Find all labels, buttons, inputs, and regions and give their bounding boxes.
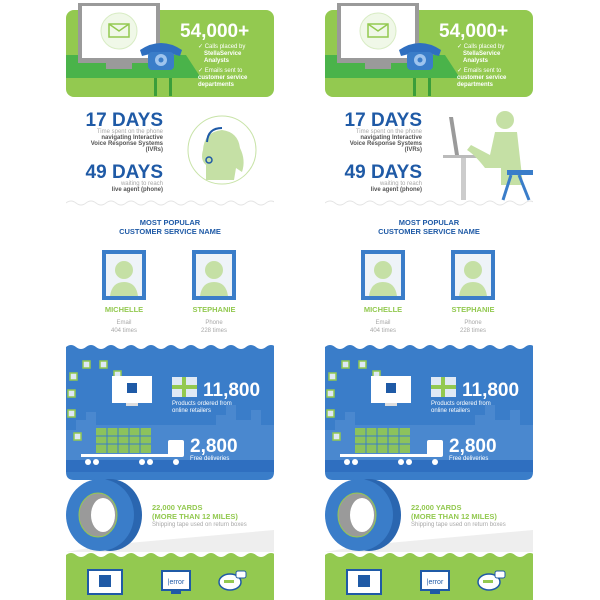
stat: 54,000+: Analysts — [463, 58, 489, 64]
stat: 17 days: Voice Response Systems — [350, 141, 423, 147]
stat: 17 days — [345, 110, 423, 153]
stat: 17 days: navigating Interactive — [101, 135, 164, 141]
stat: 22,000 yards — [152, 503, 247, 528]
stat: 11,800: 11,800 — [462, 380, 519, 401]
panel: shipping tape — [66, 479, 274, 552]
portrait: Stephanie — [192, 250, 236, 334]
portrait: Michelle: 404 times — [111, 328, 137, 334]
stat: 54,000+: StellaService — [204, 51, 242, 57]
icon: error monitor: |error — [427, 579, 444, 586]
portrait: Michelle — [361, 250, 405, 334]
stat: 22,000 yards: Shipping tape used on return boxes — [152, 522, 247, 528]
icon: gift box — [172, 377, 197, 397]
icon: speech bubbles — [478, 571, 505, 590]
portrait: Stephanie: STEPHANIE — [193, 305, 235, 314]
portrait: Stephanie: Phone — [205, 320, 223, 326]
stat: 54,000+ — [180, 21, 249, 88]
icon: monitor with envelope — [337, 3, 419, 69]
stat: 17 days — [86, 110, 164, 153]
portrait: Stephanie: Phone — [464, 320, 482, 326]
icon: monitor with gift — [112, 376, 152, 406]
portrait: Stephanie — [451, 250, 495, 334]
panel: bottom icons — [325, 553, 535, 600]
stat: 17 days: (IVRs) — [146, 147, 163, 153]
stat: 17 days: Time spent on the phone — [97, 129, 164, 135]
heading — [378, 218, 480, 236]
icon: person at desk — [443, 111, 533, 200]
icon: floating gifts — [327, 361, 380, 440]
stat: 54,000+: ✓ Emails sent to — [198, 68, 243, 74]
stat: 11,800 — [431, 380, 519, 414]
icon: desk — [66, 55, 201, 96]
icon: error monitor — [162, 571, 190, 594]
stat: 11,800: 11,800 — [203, 380, 260, 401]
icon: headset agent — [188, 116, 256, 184]
stat: 22,000 yards: 22,000 YARDS — [152, 503, 202, 512]
stat: 49 days: live agent (phone) — [371, 187, 422, 193]
portrait: Michelle — [102, 250, 146, 334]
heading: CUSTOMER SERVICE NAME — [378, 227, 480, 236]
column: left infographic — [66, 3, 274, 600]
stat: 11,800: online retailers — [172, 408, 211, 414]
heading: MOST POPULAR — [399, 218, 460, 227]
icon: floating gifts — [68, 361, 121, 440]
portrait: Stephanie: 228 times — [460, 328, 486, 334]
panel: emails and calls — [325, 3, 533, 97]
panel: online orders — [325, 345, 535, 480]
panel: IVR time — [86, 110, 256, 193]
stat: 22,000 yards: Shipping tape used on return boxes — [411, 522, 506, 528]
icon: delivery truck — [340, 428, 443, 465]
icon: tape roll — [66, 479, 142, 551]
stat: 2,800: Free deliveries — [190, 456, 229, 462]
stat: 54,000+ — [439, 21, 508, 88]
stat: 54,000+: departments — [198, 82, 235, 88]
stat: 2,800: Free deliveries — [449, 456, 488, 462]
stat: 54,000+: customer service — [457, 75, 507, 81]
stat: 11,800: online retailers — [431, 408, 470, 414]
icon: monitor with gift — [371, 376, 411, 406]
stat: 49 days: 49 DAYS — [86, 162, 163, 183]
icon: photos — [88, 570, 122, 594]
portrait: Michelle: Email — [375, 320, 391, 326]
stat: 22,000 yards — [411, 503, 506, 528]
stat: 11,800: Products ordered from — [172, 401, 232, 407]
stat: 49 days — [86, 162, 163, 193]
panel: popular names — [66, 201, 276, 334]
icon: telephone — [140, 43, 182, 70]
stat: 54,000+: customer service — [198, 75, 248, 81]
stat: 11,800 — [172, 380, 260, 414]
stat: 17 days: 17 DAYS — [86, 110, 163, 131]
stat: 54,000+: ✓ Calls placed by — [457, 44, 504, 50]
stat: 2,800: 2,800 — [190, 436, 238, 457]
panel: emails and calls — [66, 3, 274, 97]
stat: 54,000+: StellaService — [463, 51, 501, 57]
stat: 2,800: 2,800 — [449, 436, 497, 457]
stat: 54,000+: 54,000+ — [439, 21, 508, 42]
icon: error monitor — [421, 571, 449, 594]
stat: 54,000+: departments — [457, 82, 494, 88]
stat: 54,000+: 54,000+ — [180, 21, 249, 42]
icon: photos — [347, 570, 381, 594]
icon: monitor with envelope — [78, 3, 160, 69]
stat: 49 days — [345, 162, 422, 193]
stat: 54,000+: ✓ Emails sent to — [457, 68, 502, 74]
stat: 17 days: Voice Response Systems — [91, 141, 164, 147]
stat: 54,000+: Analysts — [204, 58, 230, 64]
stat: 54,000+: ✓ Calls placed by — [198, 44, 245, 50]
icon: gift box — [431, 377, 456, 397]
column: right infographic — [325, 3, 533, 600]
panel: IVR time — [345, 110, 533, 200]
stat: 17 days: navigating Interactive — [360, 135, 423, 141]
portrait: Stephanie: 228 times — [201, 328, 227, 334]
portrait: Michelle: 404 times — [370, 328, 396, 334]
stat: 17 days: Time spent on the phone — [356, 129, 423, 135]
icon: telephone — [399, 43, 441, 70]
icon: speech bubbles — [219, 571, 246, 590]
stat: 22,000 yards: (MORE THAN 12 MILES) — [152, 512, 238, 521]
icon: delivery truck — [81, 428, 184, 465]
icon: desk — [325, 55, 460, 96]
stat: 49 days: waiting to reach — [120, 181, 163, 187]
heading: MOST POPULAR — [140, 218, 201, 227]
panel: bottom icons — [66, 553, 276, 600]
heading — [119, 218, 221, 236]
stat: 17 days: 17 DAYS — [345, 110, 422, 131]
stat: 22,000 yards: 22,000 YARDS — [411, 503, 461, 512]
stat: 17 days: (IVRs) — [405, 147, 422, 153]
panel: online orders — [66, 345, 276, 480]
stat: 11,800: Products ordered from — [431, 401, 491, 407]
panel: popular names — [325, 201, 535, 334]
heading: CUSTOMER SERVICE NAME — [119, 227, 221, 236]
portrait: Michelle: MICHELLE — [105, 305, 143, 314]
portrait: Stephanie: STEPHANIE — [452, 305, 494, 314]
portrait: Michelle: MICHELLE — [364, 305, 402, 314]
stat: 49 days: live agent (phone) — [112, 187, 163, 193]
portrait: Michelle: Email — [116, 320, 132, 326]
panel: shipping tape — [325, 479, 533, 552]
stat: 22,000 yards: (MORE THAN 12 MILES) — [411, 512, 497, 521]
icon: tape roll — [325, 479, 401, 551]
stat: 49 days: 49 DAYS — [345, 162, 422, 183]
icon: error monitor: |error — [168, 579, 185, 586]
stat: 49 days: waiting to reach — [379, 181, 422, 187]
